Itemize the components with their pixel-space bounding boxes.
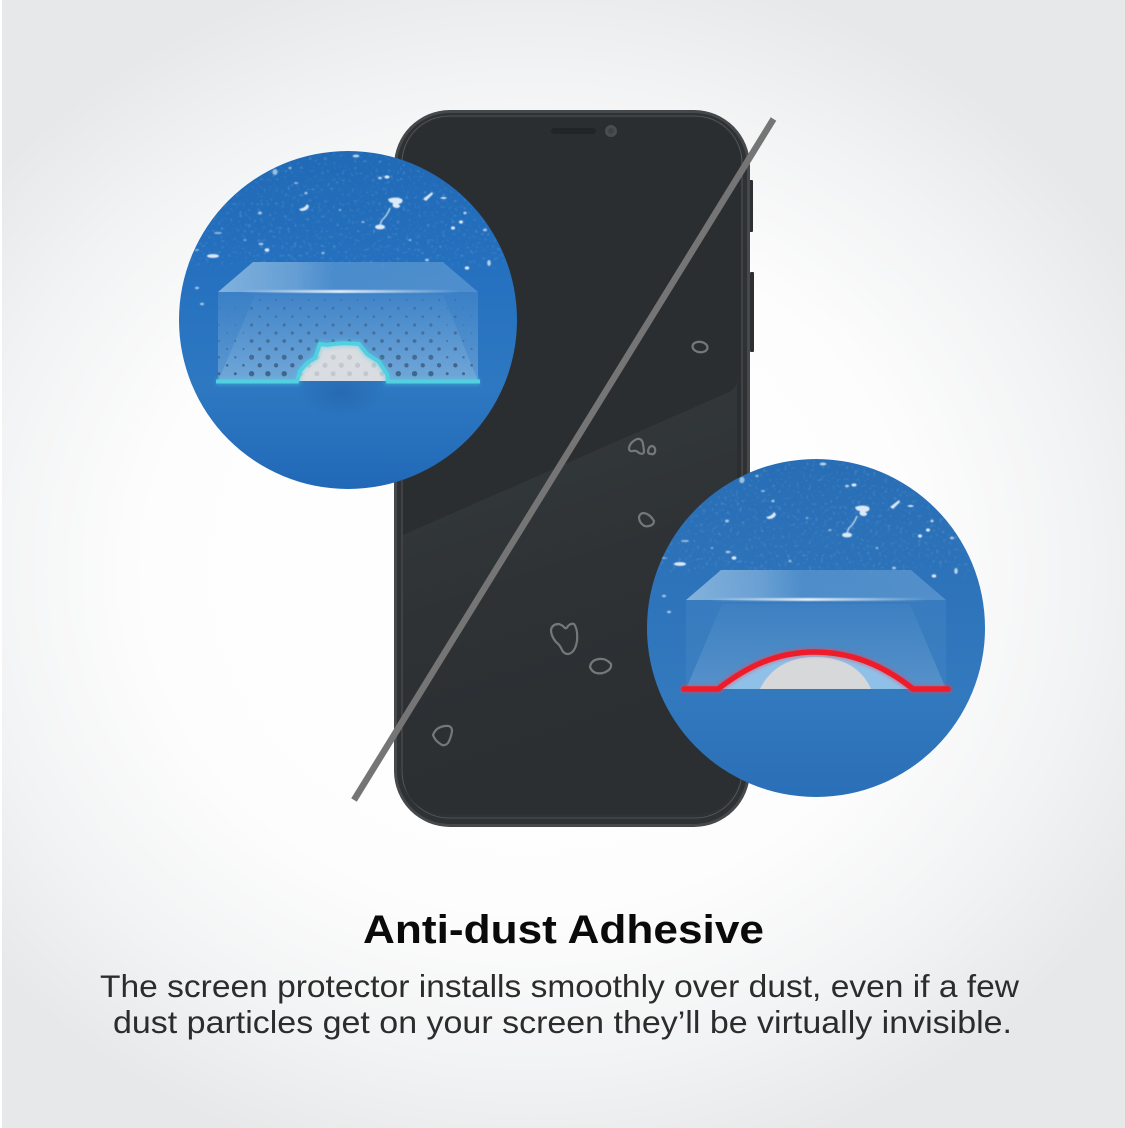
dust particle (433, 726, 452, 745)
circle: anti-dust adhesive around dust (179, 151, 517, 489)
dust specks (662, 462, 958, 613)
dust particle (692, 341, 708, 353)
dust outlines on phone (433, 341, 708, 745)
odd rows (227, 300, 480, 365)
adhesive dots (219, 300, 480, 374)
description line 2: dust particles get on your screen they’ll be virtually invisible. (113, 1004, 1012, 1040)
description (100, 968, 1019, 1040)
gap under the film (718, 652, 913, 689)
protector side body (218, 292, 478, 381)
circle: protector smoothly covering dust (647, 459, 985, 797)
glass highlight (708, 598, 928, 601)
speckled texture (192, 152, 504, 266)
protector glass top (686, 570, 946, 600)
phone body (394, 110, 750, 827)
description line 1: The screen protector installs smoothly over dust, even if a few (100, 968, 1019, 1004)
phone side buttons (749, 180, 754, 352)
title: Anti-dust Adhesive (363, 908, 764, 952)
large dust particle (551, 624, 577, 654)
faint dots inside dust (301, 357, 384, 374)
glass highlight (240, 290, 460, 293)
dust specks (195, 154, 491, 305)
trapped dust particle (760, 657, 871, 689)
phone (394, 110, 754, 827)
dust particle (590, 659, 611, 673)
cyan adhesive outline (216, 343, 480, 382)
protector side body (686, 600, 946, 689)
earpiece and camera (551, 125, 617, 137)
circle background (179, 151, 517, 489)
red film line (684, 652, 948, 689)
diagonal divider line (354, 119, 774, 800)
screen reflection (403, 380, 737, 814)
trapped dust particle (298, 345, 387, 381)
shadow beneath dust (296, 366, 386, 418)
speckled texture (659, 461, 969, 574)
even rows (219, 308, 472, 374)
circle background (647, 459, 985, 797)
dust particle (639, 513, 654, 526)
dust particle pair (629, 439, 655, 454)
phone screen (403, 118, 741, 814)
protector glass top (218, 262, 478, 292)
